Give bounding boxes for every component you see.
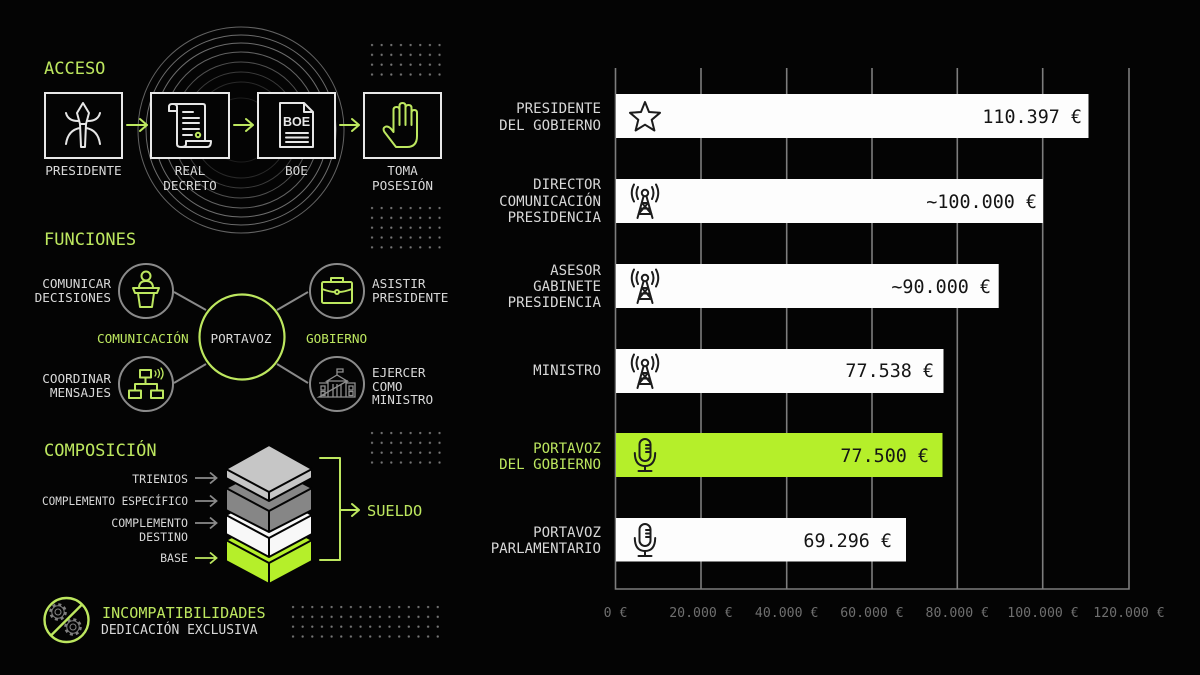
x axis labels: 0 € bbox=[604, 606, 627, 621]
node: coordinar mensajes: COORDINAR bbox=[42, 371, 111, 386]
x axis labels bbox=[604, 606, 1165, 621]
layer: trienios bbox=[226, 445, 312, 501]
node: ejercer como ministro: EJERCER bbox=[372, 365, 426, 380]
label: gobierno: GOBIERNO bbox=[306, 331, 367, 346]
concentric rings background bbox=[138, 27, 344, 233]
node: ejercer como ministro: MINISTRO bbox=[372, 392, 433, 407]
step: toma posesion: POSESIÓN bbox=[372, 178, 433, 193]
bar: portavoz del gobierno (highlighted): 77.500 € bbox=[840, 446, 929, 467]
panel: acceso bbox=[44, 59, 441, 193]
icon: antenna tower bbox=[632, 354, 658, 388]
panel: incompatibilidades bbox=[44, 598, 266, 642]
step: real decreto bbox=[151, 93, 229, 193]
bar: asesor gabinete presidencia: GABINETE bbox=[533, 279, 601, 295]
layer label: complemento destino bbox=[111, 516, 216, 544]
bar: director comunicacion presidencia: ~100.000 € bbox=[926, 192, 1037, 213]
icon: star bbox=[630, 102, 660, 130]
layer: base bbox=[226, 518, 312, 584]
layer: complemento especifico bbox=[226, 466, 312, 532]
arrow: real decreto to boe bbox=[234, 119, 253, 131]
bar: portavoz del gobierno (highlighted) bbox=[499, 433, 942, 477]
panel: composicion bbox=[42, 439, 422, 584]
bar: asesor gabinete presidencia: ~90.000 € bbox=[891, 277, 991, 298]
icon: government building bbox=[319, 369, 355, 397]
node: comunicar decisiones: DECISIONES bbox=[35, 290, 111, 305]
bar: director comunicacion presidencia: PRESIDENCIA bbox=[508, 210, 602, 226]
bar: asesor gabinete presidencia bbox=[508, 263, 999, 311]
bar: ministro: 77.538 € bbox=[845, 361, 934, 382]
node: coordinar mensajes bbox=[42, 357, 173, 411]
bar: director comunicacion presidencia bbox=[499, 177, 1043, 226]
dot pattern: middle right bbox=[371, 207, 441, 249]
icon: scroll bbox=[169, 104, 211, 147]
dot pattern: composition right bbox=[371, 432, 441, 465]
node: asistir presidente: ASISTIR bbox=[372, 276, 426, 291]
node: asistir presidente: PRESIDENTE bbox=[372, 290, 448, 305]
bar: ministro bbox=[533, 349, 944, 393]
layer: complemento destino bbox=[226, 492, 312, 557]
arrow: presidente to real decreto bbox=[127, 119, 147, 131]
heading: funciones: FUNCIONES bbox=[44, 230, 136, 250]
heading: incompatibilidades: INCOMPATIBILIDADES bbox=[102, 604, 266, 622]
icon: antenna tower bbox=[632, 184, 658, 218]
x axis labels: 120.000 € bbox=[1093, 606, 1165, 621]
icon: antenna tower bbox=[632, 270, 658, 303]
layer label: complemento especifico: COMPLEMENTO ESPECÍFICO bbox=[42, 493, 188, 508]
layer label: complemento destino: COMPLEMENTO bbox=[111, 516, 188, 530]
step: presidente: PRESIDENTE bbox=[45, 163, 122, 178]
hub: portavoz: PORTAVOZ bbox=[210, 331, 272, 346]
label: comunicacion: COMUNICACIÓN bbox=[97, 331, 189, 346]
layer label: complemento destino: DESTINO bbox=[139, 530, 188, 544]
bar: portavoz del gobierno (highlighted): PORTAVOZ bbox=[533, 441, 602, 457]
bar: asesor gabinete presidencia: ASESOR bbox=[550, 263, 602, 279]
panel: funciones bbox=[35, 230, 448, 411]
node: ejercer como ministro: COMO bbox=[372, 379, 403, 394]
heading: acceso: ACCESO bbox=[44, 59, 105, 79]
bar: ministro: MINISTRO bbox=[533, 363, 601, 379]
label: sueldo: SUELDO bbox=[367, 502, 422, 520]
icon: boe document: BOE bbox=[283, 115, 310, 129]
bar: portavoz parlamentario: PORTAVOZ bbox=[533, 525, 602, 541]
step: boe bbox=[258, 93, 335, 178]
icon: presidente emblem bbox=[66, 103, 100, 147]
connector lines bbox=[174, 292, 308, 383]
layer label: trienios: TRIENIOS bbox=[132, 472, 188, 486]
stacked layers bbox=[226, 445, 312, 584]
hub: portavoz bbox=[200, 294, 284, 380]
icon: no gears bbox=[44, 598, 88, 642]
bar: presidente del gobierno: 110.397 € bbox=[982, 107, 1082, 128]
bar chart: salaries bbox=[491, 68, 1165, 621]
bar: presidente del gobierno: PRESIDENTE bbox=[516, 101, 601, 117]
x axis labels: 20.000 € bbox=[669, 606, 733, 621]
icon: microphone bbox=[635, 439, 655, 471]
step: presidente bbox=[45, 93, 122, 178]
text: dedicacion exclusiva: DEDICACIÓN EXCLUSIVA bbox=[101, 622, 258, 638]
node: ejercer como ministro bbox=[310, 357, 433, 411]
node: comunicar decisiones: COMUNICAR bbox=[42, 276, 111, 291]
bar: portavoz parlamentario: 69.296 € bbox=[803, 531, 892, 552]
layer label: base bbox=[160, 551, 216, 565]
icon: microphone bbox=[635, 524, 655, 556]
bar: presidente del gobierno bbox=[499, 94, 1088, 138]
x axis labels: 80.000 € bbox=[926, 606, 989, 621]
bar: director comunicacion presidencia: COMUNICACIÓN bbox=[499, 192, 601, 210]
node: coordinar mensajes: MENSAJES bbox=[50, 385, 111, 400]
bracket and arrow to sueldo bbox=[320, 458, 359, 560]
icon: podium bbox=[133, 272, 159, 307]
step: real decreto: REAL bbox=[175, 163, 206, 178]
bar: portavoz del gobierno (highlighted): DEL GOBIERNO bbox=[499, 457, 601, 473]
node: asistir presidente bbox=[310, 264, 448, 318]
dot pattern: bottom bbox=[292, 606, 440, 639]
step: toma posesion bbox=[364, 93, 441, 193]
node: comunicar decisiones bbox=[35, 264, 173, 318]
bar: portavoz parlamentario: PARLAMENTARIO bbox=[491, 541, 601, 557]
layer label: trienios bbox=[132, 472, 216, 486]
step: real decreto: DECRETO bbox=[163, 178, 217, 193]
step: toma posesion: TOMA bbox=[387, 163, 418, 178]
icon: briefcase bbox=[322, 278, 352, 303]
chart grid bbox=[616, 68, 1129, 589]
x axis labels: 40.000 € bbox=[755, 606, 818, 621]
arrow: boe to toma posesion bbox=[340, 119, 359, 131]
bar: portavoz parlamentario bbox=[491, 518, 906, 562]
bar: director comunicacion presidencia: DIRECTOR bbox=[533, 177, 602, 193]
icon: hand bbox=[384, 103, 417, 147]
icon: network bbox=[129, 368, 163, 398]
bar: presidente del gobierno: DEL GOBIERNO bbox=[499, 118, 601, 134]
x axis labels: 60.000 € bbox=[840, 606, 904, 621]
dot pattern: top right bbox=[371, 44, 441, 77]
bar: asesor gabinete presidencia: PRESIDENCIA bbox=[508, 295, 602, 311]
x axis labels: 100.000 € bbox=[1007, 606, 1079, 621]
heading: composicion: COMPOSICIÓN bbox=[44, 439, 157, 461]
layer label: base: BASE bbox=[160, 551, 188, 565]
step: boe: BOE bbox=[285, 163, 308, 178]
